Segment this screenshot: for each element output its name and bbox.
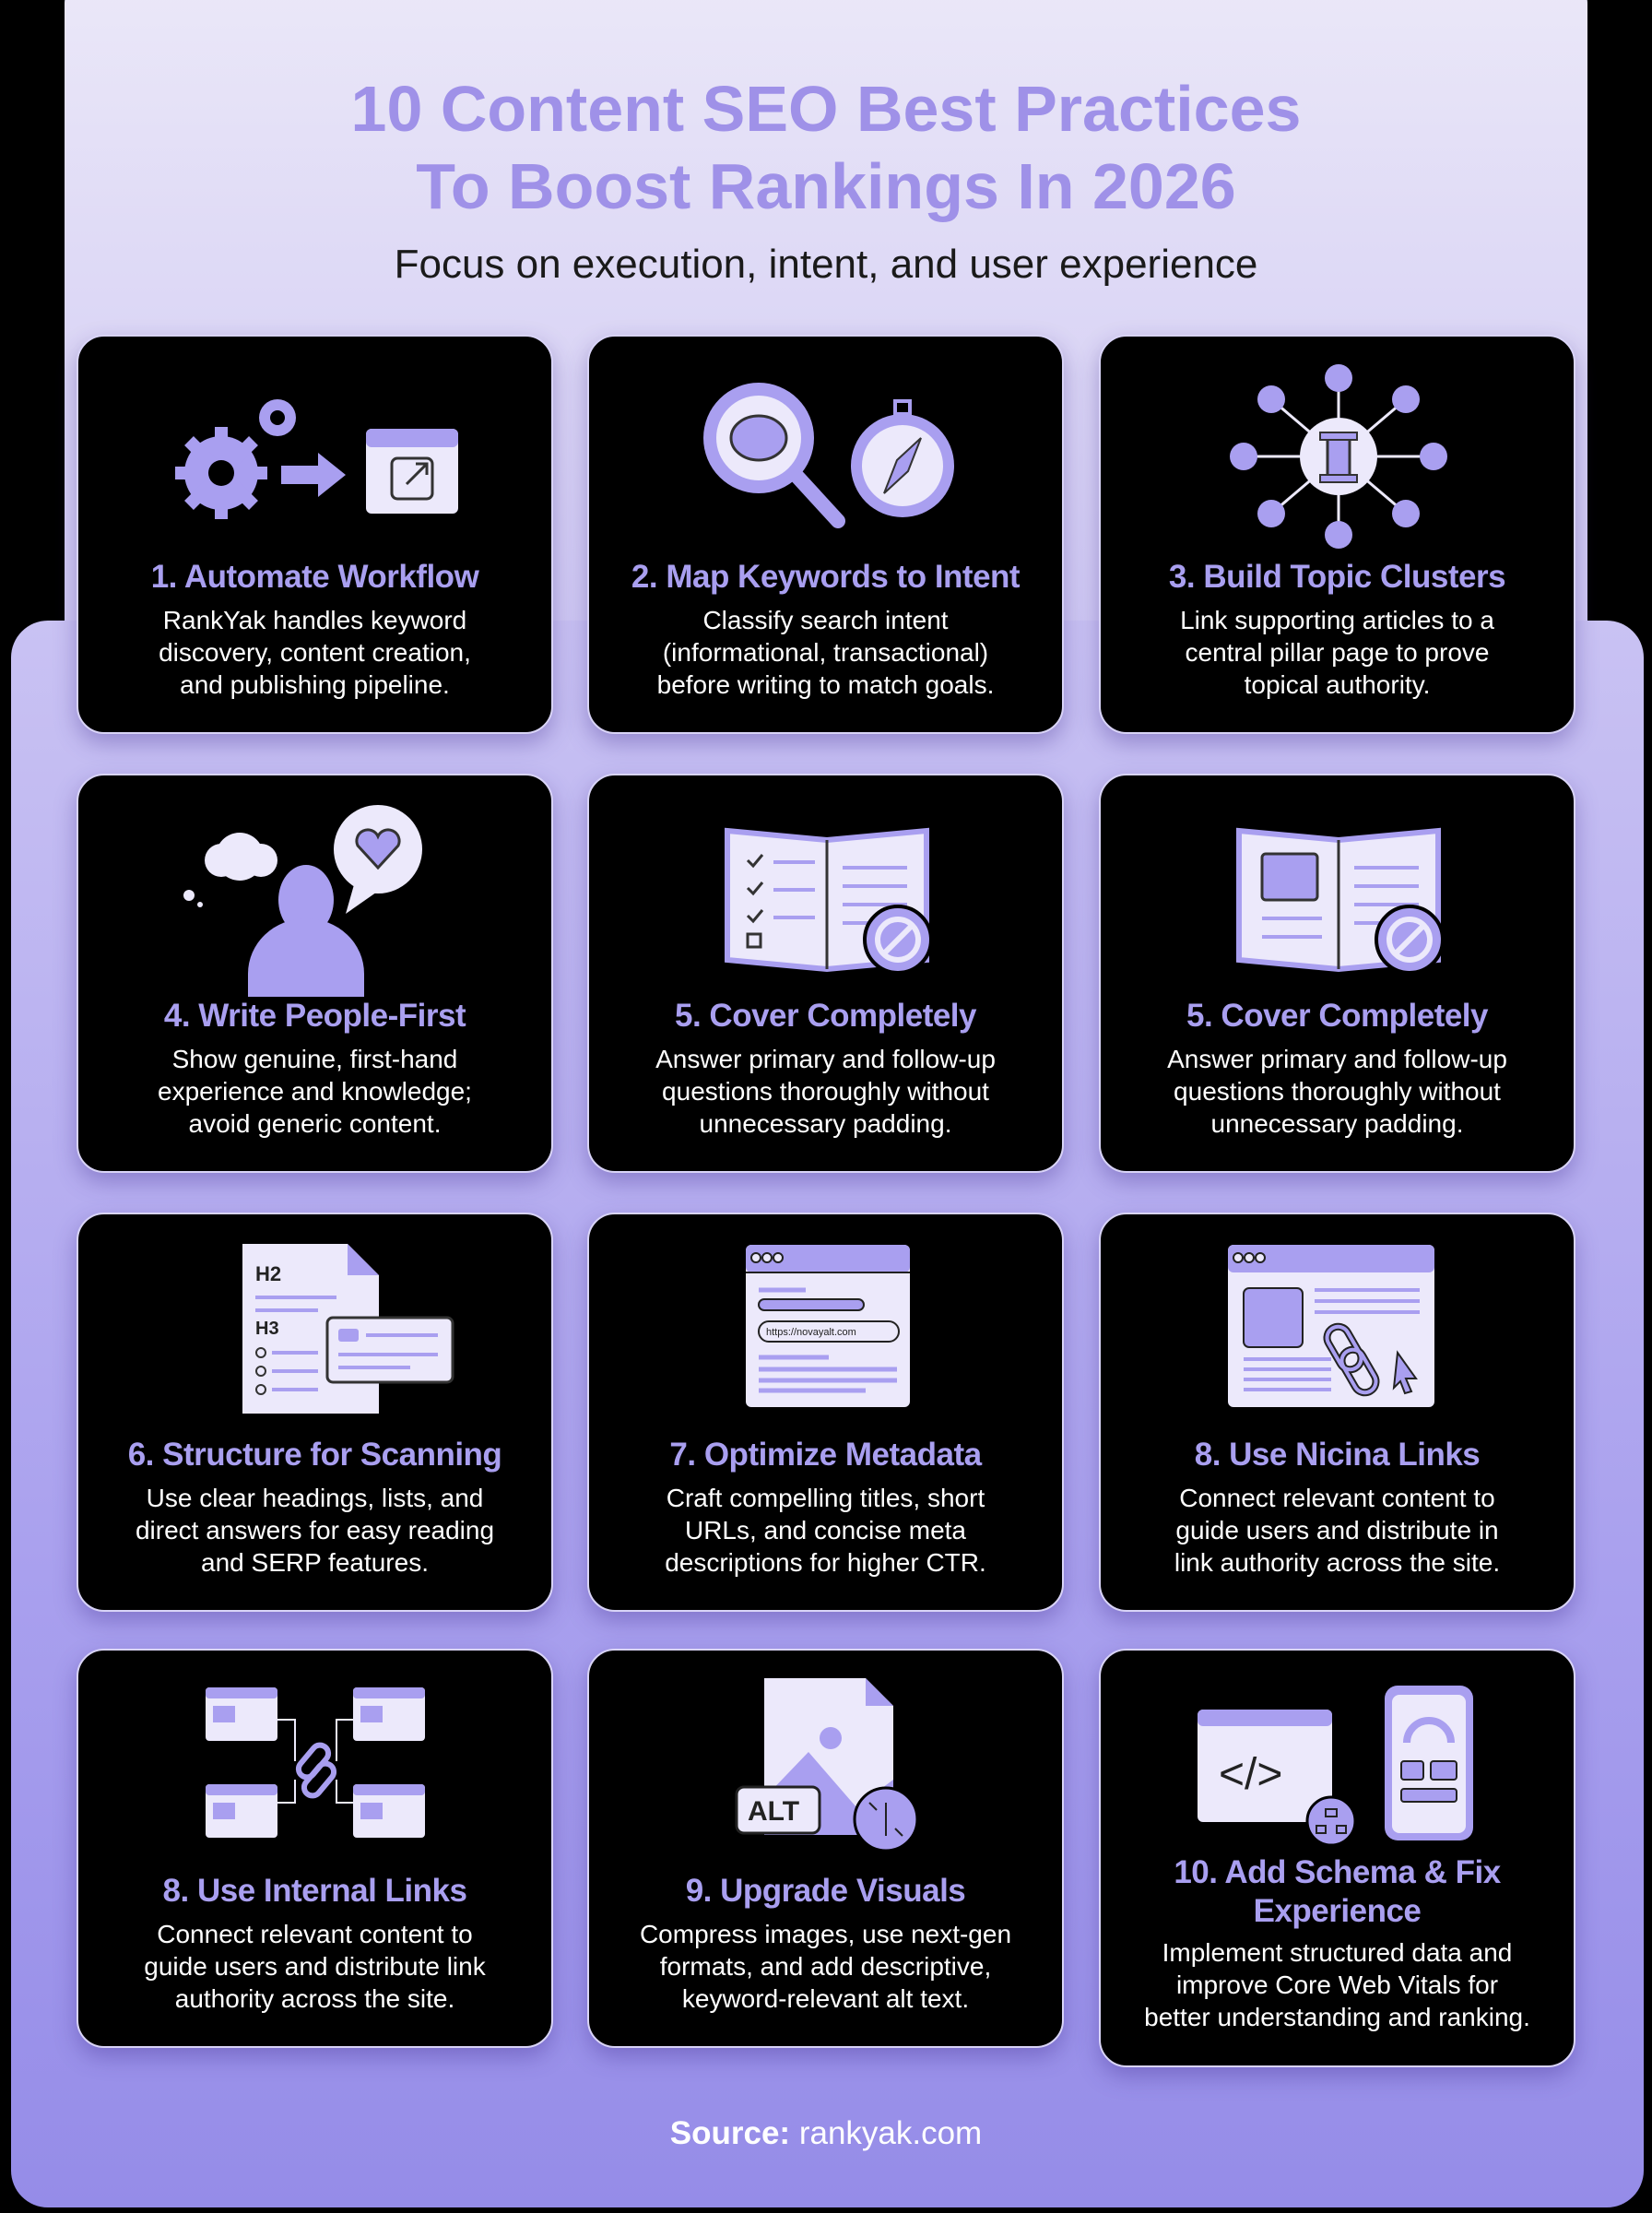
card 9: visuals: Compress images, use next-gen (640, 1920, 1011, 1948)
source footer: Source: rankyak.com (670, 2115, 982, 2151)
icon: linked pages (206, 1687, 425, 1838)
card 7: metadata: Craft compelling titles, short (667, 1484, 985, 1512)
card 6: structure (77, 1213, 553, 1612)
icon: open book (1236, 828, 1441, 972)
card 4: people first: avoid generic content. (189, 1109, 441, 1138)
card 6: structure: Use clear headings, lists, and (147, 1484, 483, 1512)
card 1: automate workflow (77, 335, 553, 734)
card 5b: cover completely duplicate (1099, 774, 1575, 1173)
card 4: people first: Show genuine, first-hand (172, 1045, 457, 1073)
icon: code window and phone (1198, 1686, 1473, 1844)
card 6: structure: 6. Structure for Scanning (128, 1437, 502, 1473)
card 10: schema: Implement structured data and (1162, 1938, 1512, 1967)
icon: hub network (1230, 364, 1447, 549)
card 7: metadata: descriptions for higher CTR. (665, 1548, 986, 1577)
card 3: topic clusters (1099, 335, 1575, 734)
icon: browser with url: https://novayalt.com (766, 1327, 856, 1338)
card 9: visuals: formats, and add descriptive, (660, 1952, 991, 1981)
card 7: metadata: URLs, and concise meta (685, 1516, 966, 1544)
icon: heading document: H2 (255, 1262, 281, 1285)
card 5: cover completely: 5. Cover Completely (675, 998, 976, 1034)
icon: image file with ALT: ALT (748, 1796, 799, 1827)
card 4: people first: experience and knowledge; (158, 1077, 472, 1106)
card 8b: internal links (77, 1649, 553, 2048)
card 10: schema: improve Core Web Vitals for (1176, 1970, 1498, 1999)
card 9: visuals: keyword-relevant alt text. (682, 1984, 969, 2013)
card 8a: internal links: Connect relevant content to (1179, 1484, 1495, 1512)
card 5b: cover completely duplicate: questions thoroughly without (1174, 1077, 1501, 1106)
icon: heading document: H3 (255, 1319, 279, 1339)
title (351, 73, 1301, 222)
card 3: topic clusters: topical authority. (1245, 670, 1430, 699)
card 5: cover completely: Answer primary and follow-up (655, 1045, 996, 1073)
title: To Boost Rankings In 2026 (416, 150, 1236, 222)
card 8b: internal links: authority across the site. (175, 1984, 454, 2013)
card 3: topic clusters: Link supporting articles to a (1180, 606, 1494, 634)
card 3: topic clusters: central pillar page to prove (1186, 638, 1489, 667)
icon: browser with url (746, 1245, 910, 1407)
card 10: schema: 10. Add Schema & Fix (1174, 1854, 1501, 1890)
card 2: map keywords: Classify search intent (702, 606, 949, 634)
card 5: cover completely: unnecessary padding. (699, 1109, 951, 1138)
card 3: topic clusters: 3. Build Topic Clusters (1169, 559, 1505, 595)
card 10: schema: better understanding and ranking. (1144, 2003, 1530, 2031)
card 2: map keywords: before writing to match goals. (657, 670, 994, 699)
icon: person with bubbles (183, 805, 422, 997)
card 8b: internal links: Connect relevant content to (157, 1920, 473, 1948)
card 1: automate workflow: 1. Automate Workflow (151, 559, 478, 595)
icon: gears and window (175, 399, 458, 519)
card 10: schema (1099, 1649, 1575, 2067)
card 10: schema: Experience (1254, 1893, 1421, 1929)
icon: brain magnifier and compass (703, 383, 954, 528)
card 1: automate workflow: and publishing pipeline. (180, 670, 450, 699)
card 5b: cover completely duplicate: unnecessary padding. (1211, 1109, 1463, 1138)
icon: heading document (242, 1244, 454, 1414)
card 9: visuals: 9. Upgrade Visuals (686, 1873, 965, 1909)
card 5b: cover completely duplicate: Answer primary and follow-up (1167, 1045, 1507, 1073)
card 2: map keywords: (informational, transactional) (663, 638, 988, 667)
card 2: map keywords (587, 335, 1064, 734)
subtitle: Focus on execution, intent, and user experience (395, 242, 1257, 287)
card 8a: internal links: guide users and distribute in (1175, 1516, 1499, 1544)
icon: open book checklist (725, 828, 929, 972)
icon: image file with ALT (736, 1678, 916, 1850)
card 7: metadata: 7. Optimize Metadata (669, 1437, 982, 1473)
icon: code window and phone: </> (1219, 1750, 1282, 1799)
card 5: cover completely (587, 774, 1064, 1173)
card 4: people first (77, 774, 553, 1173)
card 6: structure: direct answers for easy reading (136, 1516, 494, 1544)
card 5b: cover completely duplicate: 5. Cover Completely (1186, 998, 1488, 1034)
card 8a: internal links: link authority across the site. (1174, 1548, 1500, 1577)
card 1: automate workflow: RankYak handles keyword (163, 606, 466, 634)
card 2: map keywords: 2. Map Keywords to Intent (631, 559, 1020, 595)
title: 10 Content SEO Best Practices (351, 73, 1301, 145)
card 8a: internal links (1099, 1213, 1575, 1612)
card 8b: internal links: 8. Use Internal Links (163, 1873, 466, 1909)
card 8a: internal links: 8. Use Nicina Links (1195, 1437, 1480, 1473)
card 5: cover completely: questions thoroughly without (662, 1077, 989, 1106)
card 7: metadata (587, 1213, 1064, 1612)
card 1: automate workflow: discovery, content creation, (159, 638, 471, 667)
icon: browser with chain link (1228, 1245, 1434, 1407)
card 6: structure: and SERP features. (201, 1548, 429, 1577)
card 4: people first: 4. Write People-First (164, 998, 466, 1034)
card 9: visuals (587, 1649, 1064, 2048)
card 8b: internal links: guide users and distribute link (144, 1952, 486, 1981)
